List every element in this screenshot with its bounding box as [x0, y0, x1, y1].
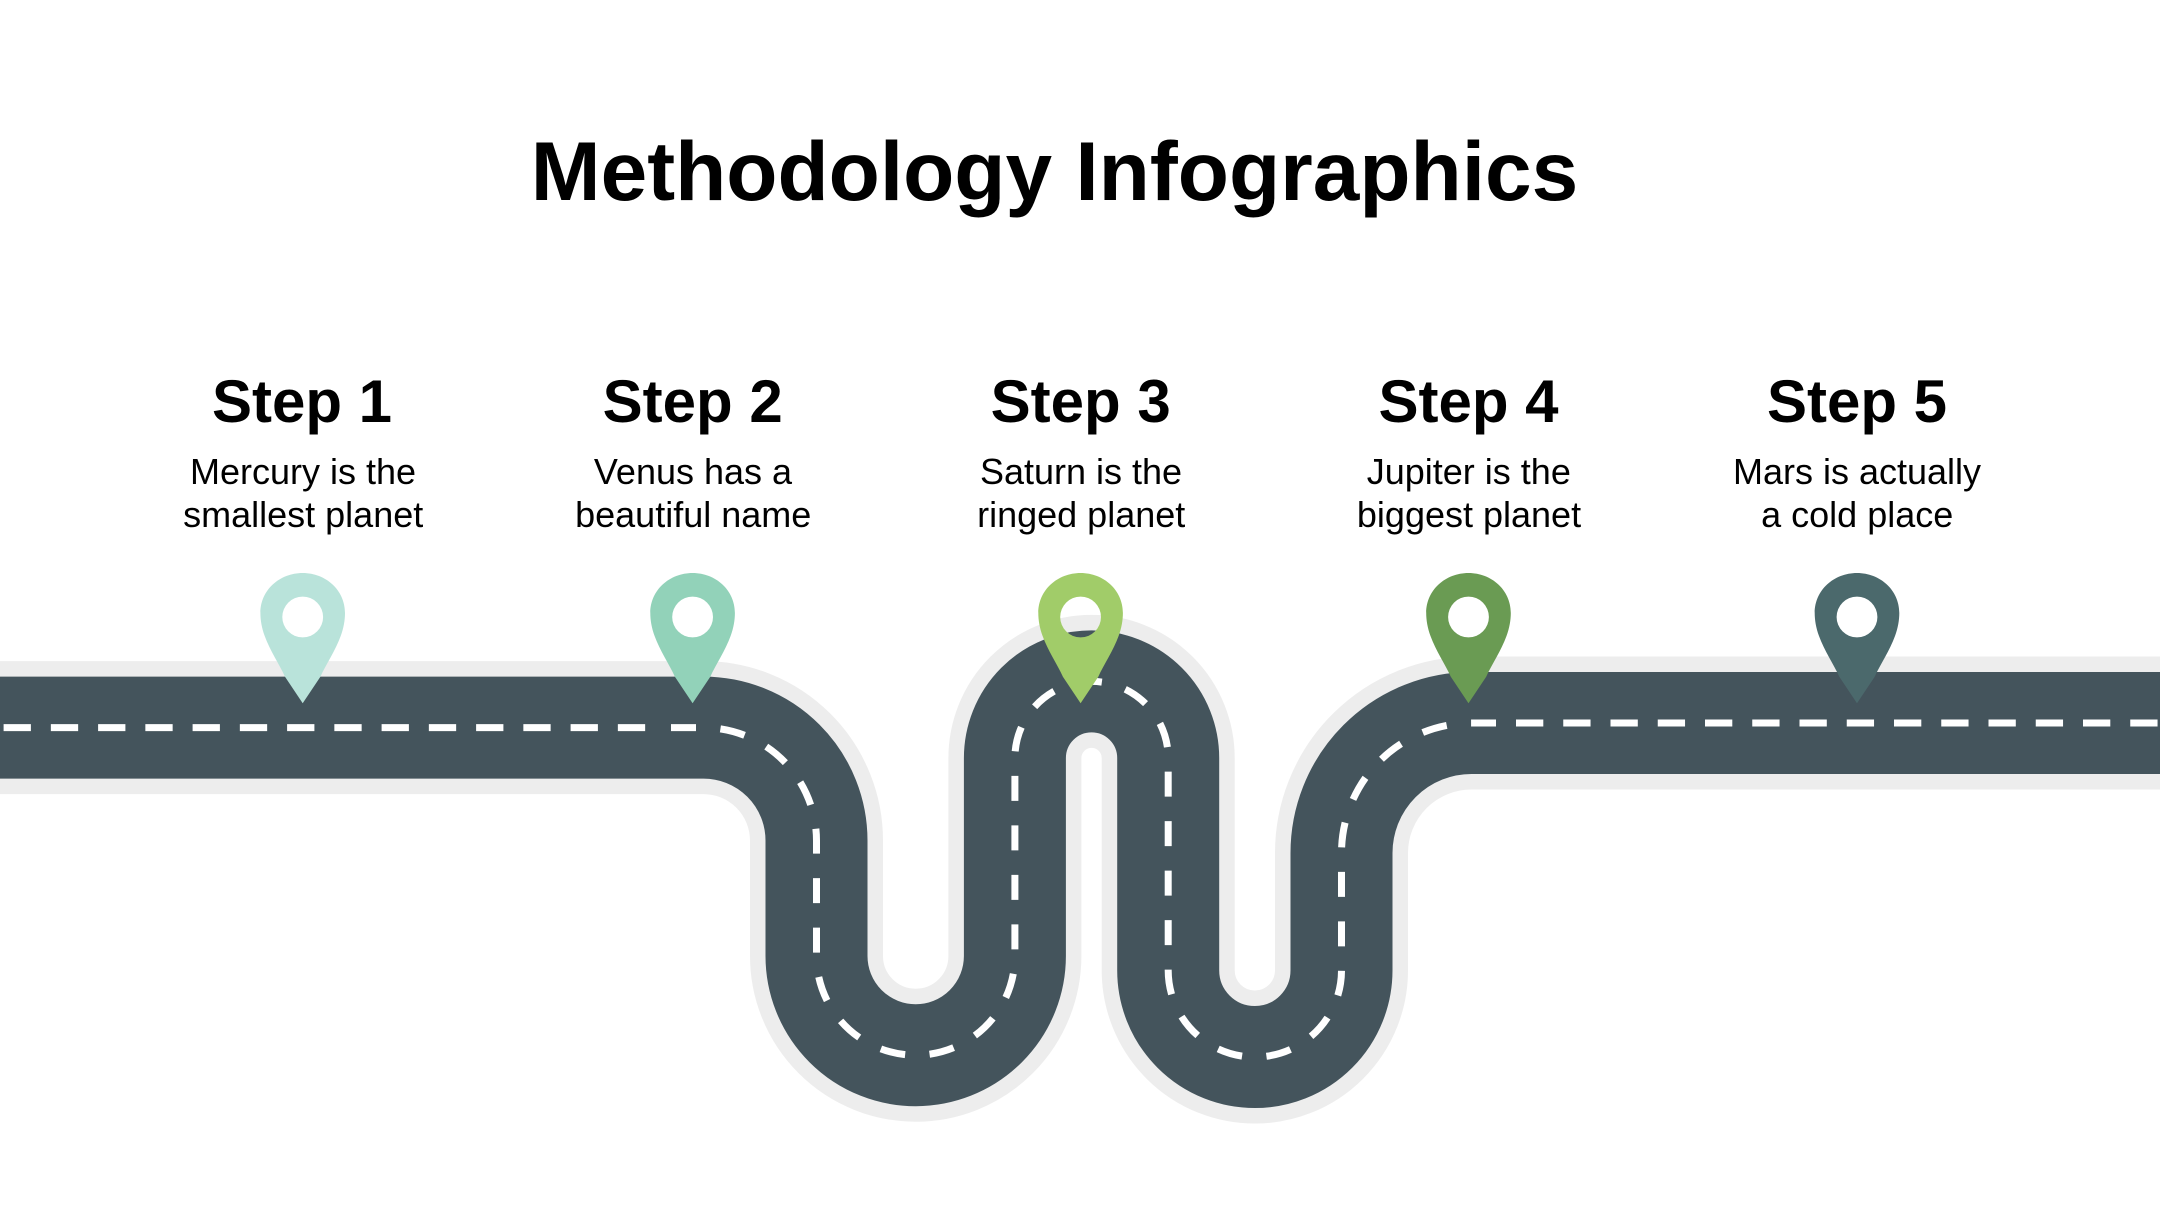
step 4 heading: Step 4 — [1378, 368, 1559, 435]
step 1 description: smallest planet — [183, 494, 423, 535]
step 4 — [1357, 368, 1581, 703]
step 1 description: Mercury is the — [190, 451, 416, 492]
step 2 description: Venus has a — [594, 451, 793, 492]
step 3 description: Saturn is the — [980, 451, 1182, 492]
centre line: right straight — [1516, 720, 2160, 726]
step 5 heading: Step 5 — [1767, 368, 1947, 435]
road surface — [0, 681, 2160, 1057]
title: Methodology Infographics — [531, 124, 1578, 218]
step 3 heading: Step 3 — [991, 368, 1171, 435]
step 5 — [1733, 368, 1981, 703]
step 5 description: Mars is actually — [1733, 451, 1981, 492]
step 3 pin — [1038, 573, 1123, 703]
road halo — [0, 681, 2160, 1057]
step 2 pin — [650, 573, 735, 703]
road — [0, 681, 2160, 1057]
step 2 — [575, 368, 811, 703]
step 4 description: Jupiter is the — [1367, 451, 1571, 492]
step 4 pin — [1426, 573, 1511, 703]
step 3 — [977, 368, 1185, 703]
step 3 description: ringed planet — [977, 494, 1185, 535]
step 1 — [183, 368, 423, 703]
centre line: left straight — [4, 724, 647, 731]
step 4 description: biggest planet — [1357, 494, 1581, 535]
step 1 heading: Step 1 — [212, 368, 392, 435]
step 5 description: a cold place — [1761, 494, 1953, 535]
step 1 pin — [260, 573, 345, 703]
step 5 pin — [1815, 573, 1899, 703]
step 2 heading: Step 2 — [603, 368, 783, 435]
centre line: curves — [671, 681, 1496, 1057]
step 2 description: beautiful name — [575, 494, 811, 535]
